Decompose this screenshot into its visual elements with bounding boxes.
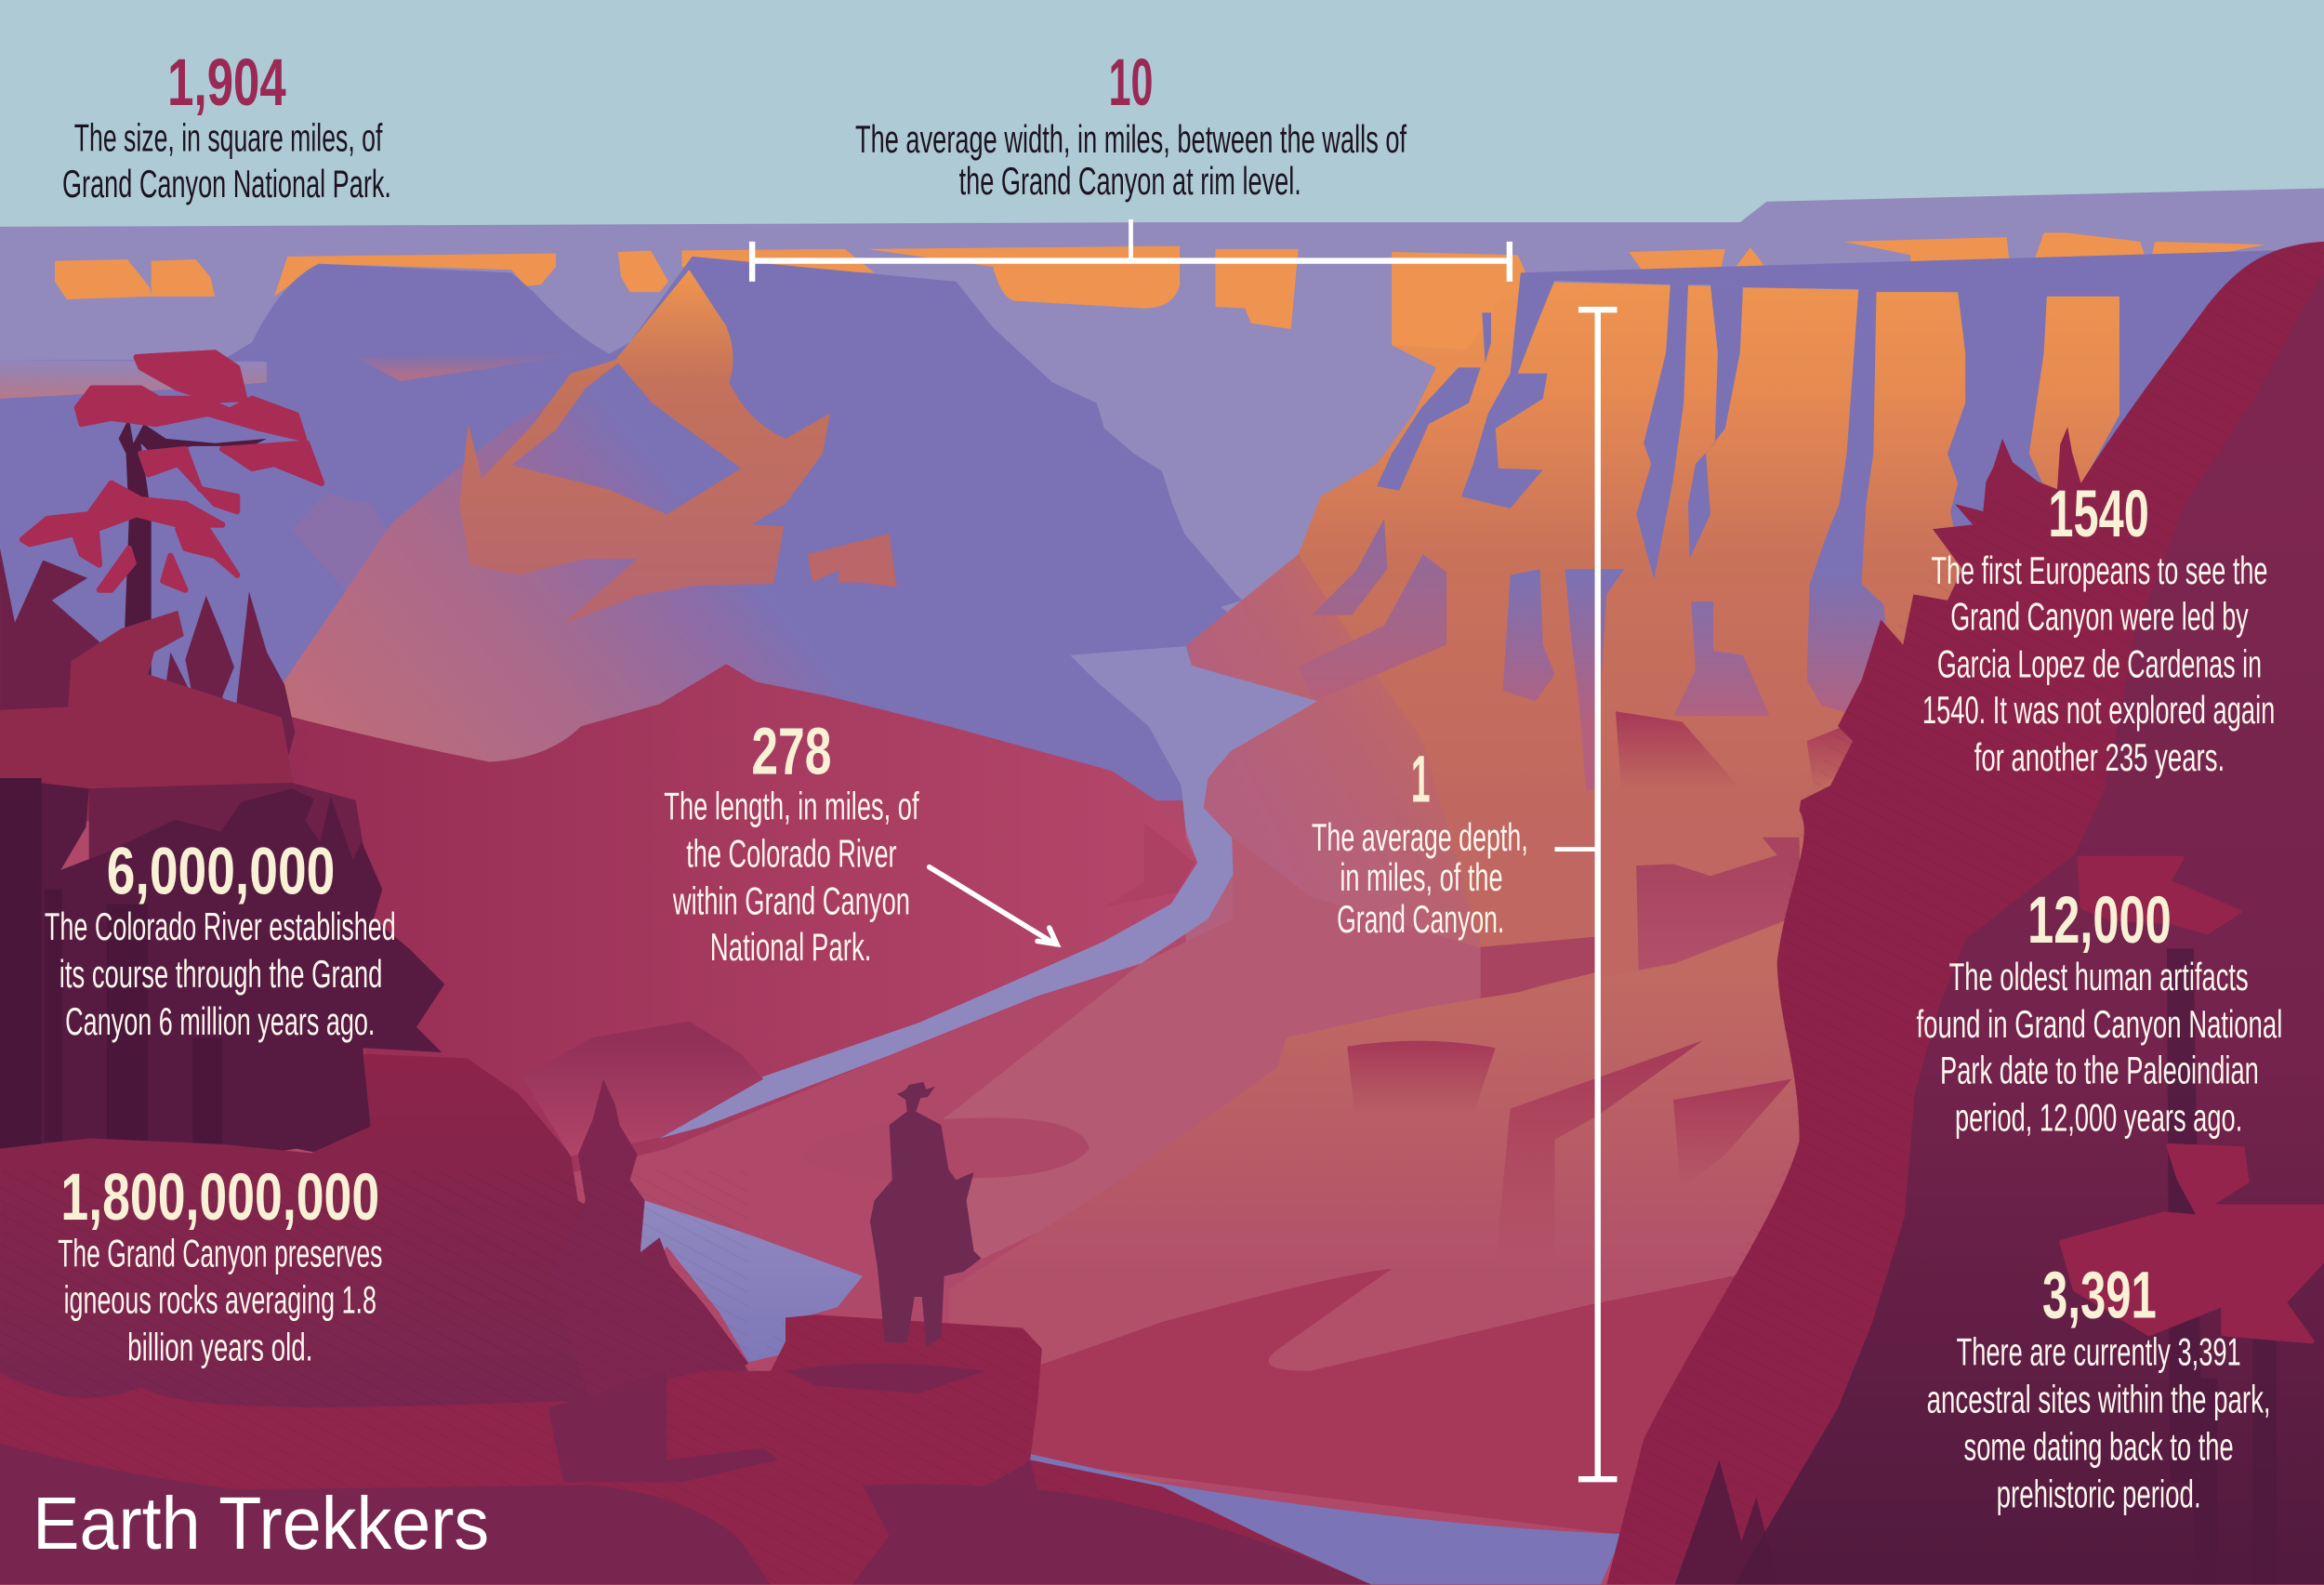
stat: river length: The length, in miles, of (664, 785, 919, 828)
right canyon wall (1186, 255, 2119, 1037)
left cherry hillside (0, 611, 297, 830)
right tree foliage (2062, 858, 2324, 1341)
canyon alcove (1347, 1041, 1496, 1115)
stat: rock age: billion years old. (127, 1326, 312, 1369)
depth bracket (1555, 310, 1617, 1479)
stat: river age: 6,000,000 (107, 834, 335, 908)
stat: average depth: The average depth, (1312, 815, 1528, 859)
stat: first Europeans: 1540 (2048, 477, 2149, 551)
right cliff (1606, 242, 2324, 1584)
stat: river age (45, 834, 396, 1043)
Colorado River (660, 646, 1314, 1138)
red strata block (1807, 720, 1858, 790)
stat: average width (855, 46, 1406, 203)
foreground texture (0, 1171, 1371, 1584)
mid canyon terrace (948, 915, 1801, 1482)
stat: ancestral sites (1927, 1258, 2271, 1515)
plum rock shadows (548, 1364, 1037, 1497)
band on left mesa (356, 352, 586, 381)
foreground hill (0, 1054, 748, 1423)
stat: average depth: in miles, of the (1340, 855, 1503, 899)
stat: river age: Canyon 6 million years ago. (65, 999, 375, 1043)
mauve canyon lobe (1299, 554, 1446, 701)
river lower stretch (1030, 1454, 1623, 1584)
plum hill bottom right (852, 1485, 1371, 1584)
right dark forest slope (1734, 271, 2324, 1584)
stat: first Europeans (1922, 477, 2275, 779)
tree trunk (119, 418, 267, 726)
stat: park size: Grand Canyon National Park. (62, 162, 391, 205)
stat: oldest artifacts: 12,000 (2027, 883, 2172, 958)
stat: park size (62, 46, 391, 205)
cowboy on horseback silhouette (870, 1082, 981, 1347)
stat: average width: the Grand Canyon at rim level. (959, 159, 1301, 203)
pink shading on canyon left side (1186, 554, 1482, 963)
stat: average width: 10 (1109, 46, 1153, 120)
brand: Earth Trekkers: Earth Trekkers (33, 1482, 489, 1565)
stat: river age: its course through the Grand (59, 952, 382, 996)
river lower left (638, 1200, 863, 1362)
stat: river length: the Colorado River (686, 832, 897, 876)
small fir tree (548, 1079, 748, 1408)
stat: ancestral sites: 3,391 (2042, 1258, 2157, 1332)
small mauve recess (1312, 519, 1387, 615)
orange rock strata along far rim (55, 232, 2266, 356)
stat: rock age: The Grand Canyon preserves (58, 1231, 382, 1275)
light band behind left mesa (0, 360, 267, 399)
left dark forest (0, 778, 444, 1171)
tree foliage (22, 352, 322, 590)
stat: average depth: 1 (1411, 743, 1431, 817)
small mauve hill (292, 494, 390, 590)
stat: river length: 278 (751, 714, 831, 788)
left back forest trees (0, 548, 295, 771)
arrow to river (930, 867, 1057, 944)
canyon spike (1496, 1040, 1703, 1261)
stat: average width: The average width, in miles, between the walls of (855, 117, 1406, 161)
stat: river length: National Park. (710, 925, 872, 969)
central mauve mountain (274, 356, 1242, 800)
subtle mid-canyon blob (800, 1117, 1089, 1180)
canyon alcove right (1673, 1079, 1792, 1190)
width bracket (752, 219, 1510, 282)
foreground cherry slopes (0, 1314, 1371, 1584)
left mesa and blue valley (0, 264, 638, 771)
right forest trees (1675, 948, 2277, 1584)
plum band behind forest (89, 783, 371, 890)
left pine tree (22, 352, 322, 726)
orange central ridge (459, 270, 830, 624)
stat: river length (664, 714, 919, 969)
darker river-bank shading (1104, 823, 1195, 907)
blue gaps between canyon columns (1377, 249, 2324, 790)
dark strata block (1616, 711, 1741, 790)
far canyon rim (0, 188, 2324, 830)
stat: oldest artifacts (1917, 883, 2282, 1139)
hill mid ridge (522, 1022, 763, 1156)
small rock arch (808, 534, 897, 587)
lower canyon pink hill (933, 838, 1482, 1275)
stat: rock age (58, 1160, 382, 1369)
dark canyon foreground (1023, 1269, 1740, 1541)
right cliff texture (1606, 242, 2324, 1584)
forest trunks (0, 778, 222, 1149)
stat: park size: 1,904 (167, 46, 286, 120)
central blue mesa (593, 257, 1242, 800)
dark wall section (1636, 838, 1801, 996)
stat: river length: within Grand Canyon (672, 879, 910, 923)
stat: average depth: Grand Canyon. (1337, 897, 1504, 941)
stat: rock age: 1,800,000,000 (60, 1160, 379, 1235)
lower canyon base (0, 800, 2324, 1585)
stat: average depth (1312, 743, 1528, 941)
stat: river age: The Colorado River established (45, 905, 396, 948)
red central ridge (282, 664, 1197, 1185)
stat: park size: The size, in square miles, of (74, 116, 383, 160)
plum bottom foreground (0, 1444, 771, 1584)
stat: rock age: igneous rocks averaging 1.8 (64, 1278, 376, 1322)
sky (0, 0, 2324, 237)
stat: ancestral sites: prehistoric period. (1997, 1472, 2201, 1515)
block by depth line (1481, 937, 1596, 1003)
